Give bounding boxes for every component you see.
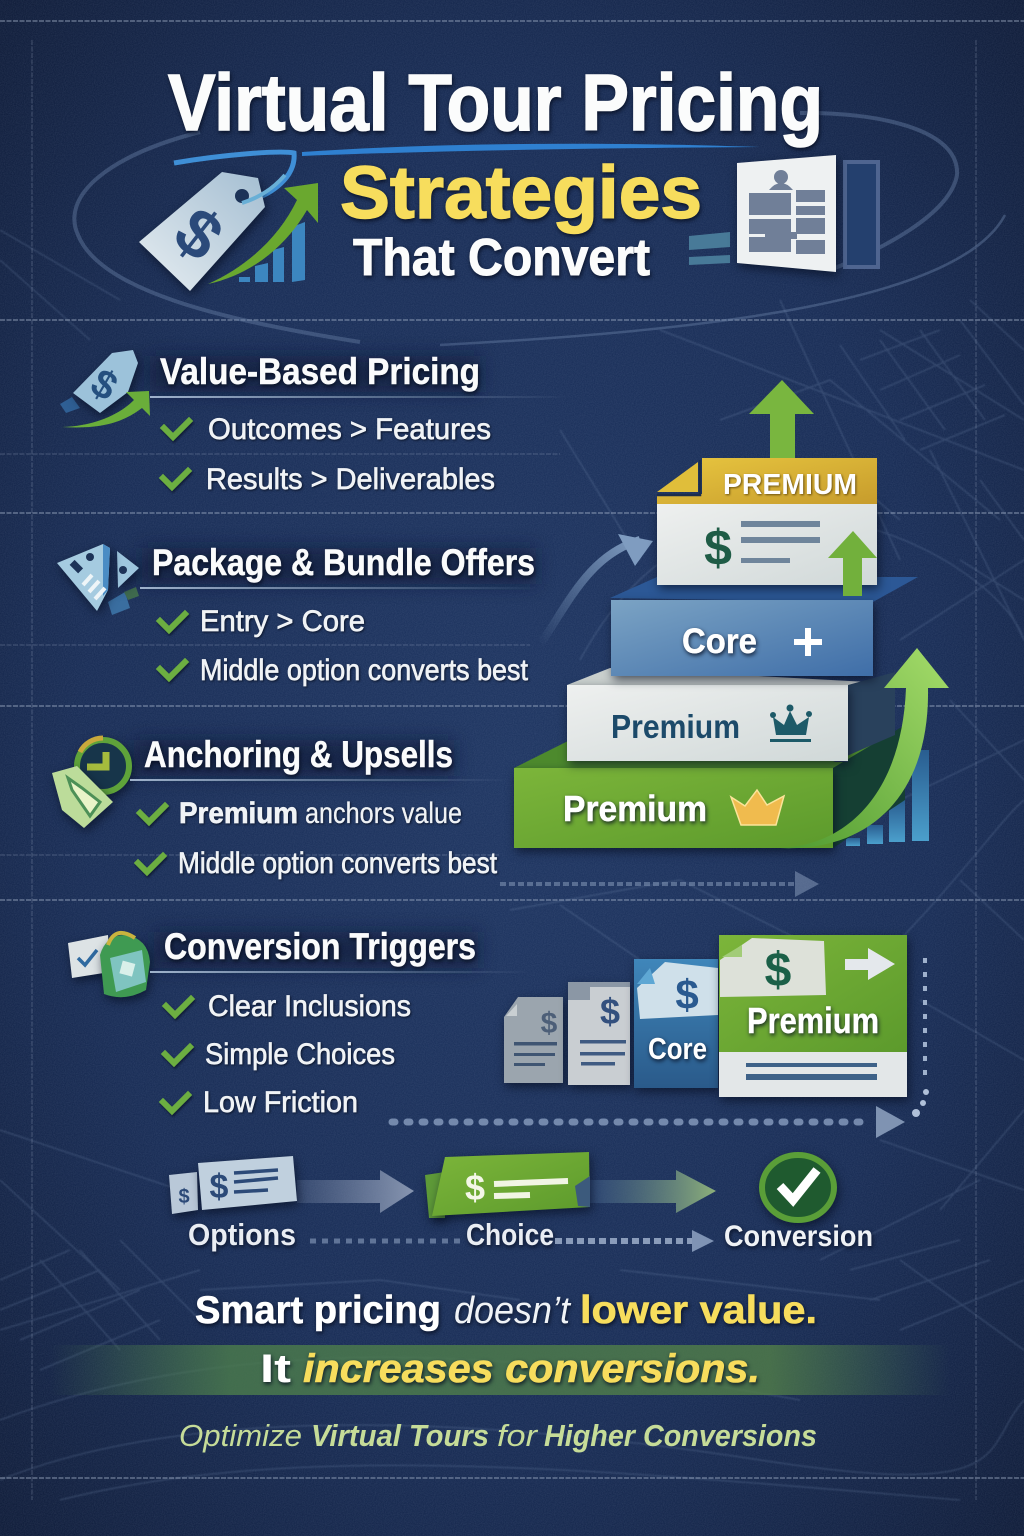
step: options bbox=[169, 1156, 414, 1252]
step: premium card: PREMIUM bbox=[723, 469, 857, 501]
icon: value tag: $ bbox=[83, 360, 125, 410]
step: green premium: Premium bbox=[563, 788, 707, 829]
step: conversion bbox=[724, 1155, 873, 1253]
step: choice bbox=[425, 1152, 716, 1252]
heading shadow bbox=[150, 356, 480, 392]
bullets: Middle option converts best bbox=[200, 654, 529, 687]
heading shadow bbox=[154, 932, 478, 968]
title bbox=[168, 58, 823, 287]
title: Virtual Tour Pricing bbox=[168, 58, 823, 147]
step: white premium: Premium bbox=[611, 708, 740, 745]
step: blue core bbox=[610, 577, 918, 676]
tagline: Optimize bbox=[179, 1418, 302, 1453]
bullets: Entry > Core bbox=[200, 605, 365, 638]
icon: value tag bbox=[60, 350, 150, 427]
line one bbox=[195, 1289, 817, 1332]
arrow: top up arrow bbox=[749, 380, 814, 458]
icon: teal crown bbox=[770, 704, 812, 742]
bullets: Low Friction bbox=[203, 1086, 358, 1119]
icon: floor plan document bbox=[689, 155, 878, 272]
icon: checklist and badge bbox=[68, 933, 150, 997]
step: choice: Choice bbox=[466, 1217, 554, 1252]
doc: core bbox=[634, 959, 718, 1088]
doc: premium: Premium bbox=[747, 1000, 879, 1041]
bullets: Outcomes > Features bbox=[208, 413, 491, 446]
icon: packages bbox=[57, 544, 139, 615]
bullets bbox=[160, 605, 529, 687]
step: options: Options bbox=[188, 1217, 296, 1252]
bullets: Clear Inclusions bbox=[208, 990, 411, 1023]
dashed arrow bbox=[500, 871, 819, 897]
title: That Convert bbox=[353, 229, 650, 287]
line one: lower value. bbox=[580, 1289, 817, 1332]
doc: basic bbox=[504, 997, 563, 1083]
dotted line bbox=[310, 1230, 714, 1252]
pricing documents row bbox=[504, 935, 907, 1097]
doc: entry: $ bbox=[600, 991, 620, 1032]
band bbox=[50, 1345, 950, 1395]
bullets: Middle option converts best bbox=[178, 847, 498, 880]
bullets: anchors value bbox=[305, 797, 462, 830]
heading: Package & Bundle Offers bbox=[152, 542, 535, 583]
arrow: big curved growth arrow bbox=[780, 648, 949, 848]
bullets: Results > Deliverables bbox=[206, 463, 495, 496]
section: Conversion Triggers bbox=[68, 926, 530, 1119]
step: options: $ bbox=[210, 1168, 229, 1206]
bullets: Simple Choices bbox=[205, 1038, 395, 1071]
bullets bbox=[138, 797, 498, 880]
tagline: Higher Conversions bbox=[544, 1418, 817, 1453]
doc: core: $ bbox=[675, 971, 699, 1018]
step: premium card bbox=[657, 458, 877, 596]
header swoosh ring bbox=[74, 113, 1005, 345]
step: blue core: Core bbox=[682, 622, 757, 661]
line two: increases conversions. bbox=[303, 1347, 760, 1391]
heading: Anchoring & Upsells bbox=[144, 734, 453, 775]
doc: entry bbox=[568, 982, 630, 1085]
tagline: Virtual Tours bbox=[311, 1418, 489, 1453]
curved arrow to top card bbox=[540, 534, 653, 645]
tagline: for bbox=[497, 1418, 539, 1453]
line one: doesn’t bbox=[454, 1290, 571, 1332]
heading: Value-Based Pricing bbox=[160, 351, 480, 392]
icon: clock and money bbox=[52, 738, 129, 828]
icon: price tag with growth arrow: $ bbox=[160, 193, 237, 276]
flow: options to conversion bbox=[169, 1152, 873, 1253]
title: Strategies bbox=[340, 151, 702, 234]
line one: Smart pricing bbox=[195, 1289, 441, 1332]
line two: It bbox=[260, 1347, 291, 1391]
tagline bbox=[179, 1418, 817, 1453]
doc: core: Core bbox=[648, 1031, 707, 1066]
bullets: Premium bbox=[179, 797, 298, 830]
step: white premium bbox=[567, 668, 895, 762]
step: conversion: Conversion bbox=[724, 1220, 873, 1253]
heading: Conversion Triggers bbox=[164, 926, 476, 967]
bullets bbox=[163, 990, 411, 1119]
doc: basic: $ bbox=[541, 1007, 558, 1040]
dotted arrow to premium bbox=[392, 958, 929, 1138]
heading shadow bbox=[142, 548, 536, 584]
bars bbox=[846, 750, 929, 846]
section: Value-Based Pricing bbox=[60, 350, 570, 496]
section: Anchoring & Upsells bbox=[52, 734, 510, 880]
icon: gold crown bbox=[731, 790, 784, 825]
step: options: $ bbox=[178, 1186, 190, 1208]
closing message bbox=[50, 1289, 950, 1453]
doc: premium bbox=[719, 935, 907, 1097]
section: Package & Bundle Offers bbox=[57, 542, 540, 687]
bullets bbox=[163, 413, 495, 496]
heading shadow bbox=[134, 740, 454, 776]
step: choice: $ bbox=[465, 1167, 485, 1208]
step: green premium bbox=[514, 725, 905, 848]
doc: premium: $ bbox=[765, 944, 792, 997]
icon: price tag with growth arrow bbox=[139, 152, 318, 291]
underline swoosh bbox=[302, 144, 760, 156]
step: premium card: $ bbox=[704, 520, 732, 576]
chart: pricing stack bbox=[514, 380, 949, 848]
